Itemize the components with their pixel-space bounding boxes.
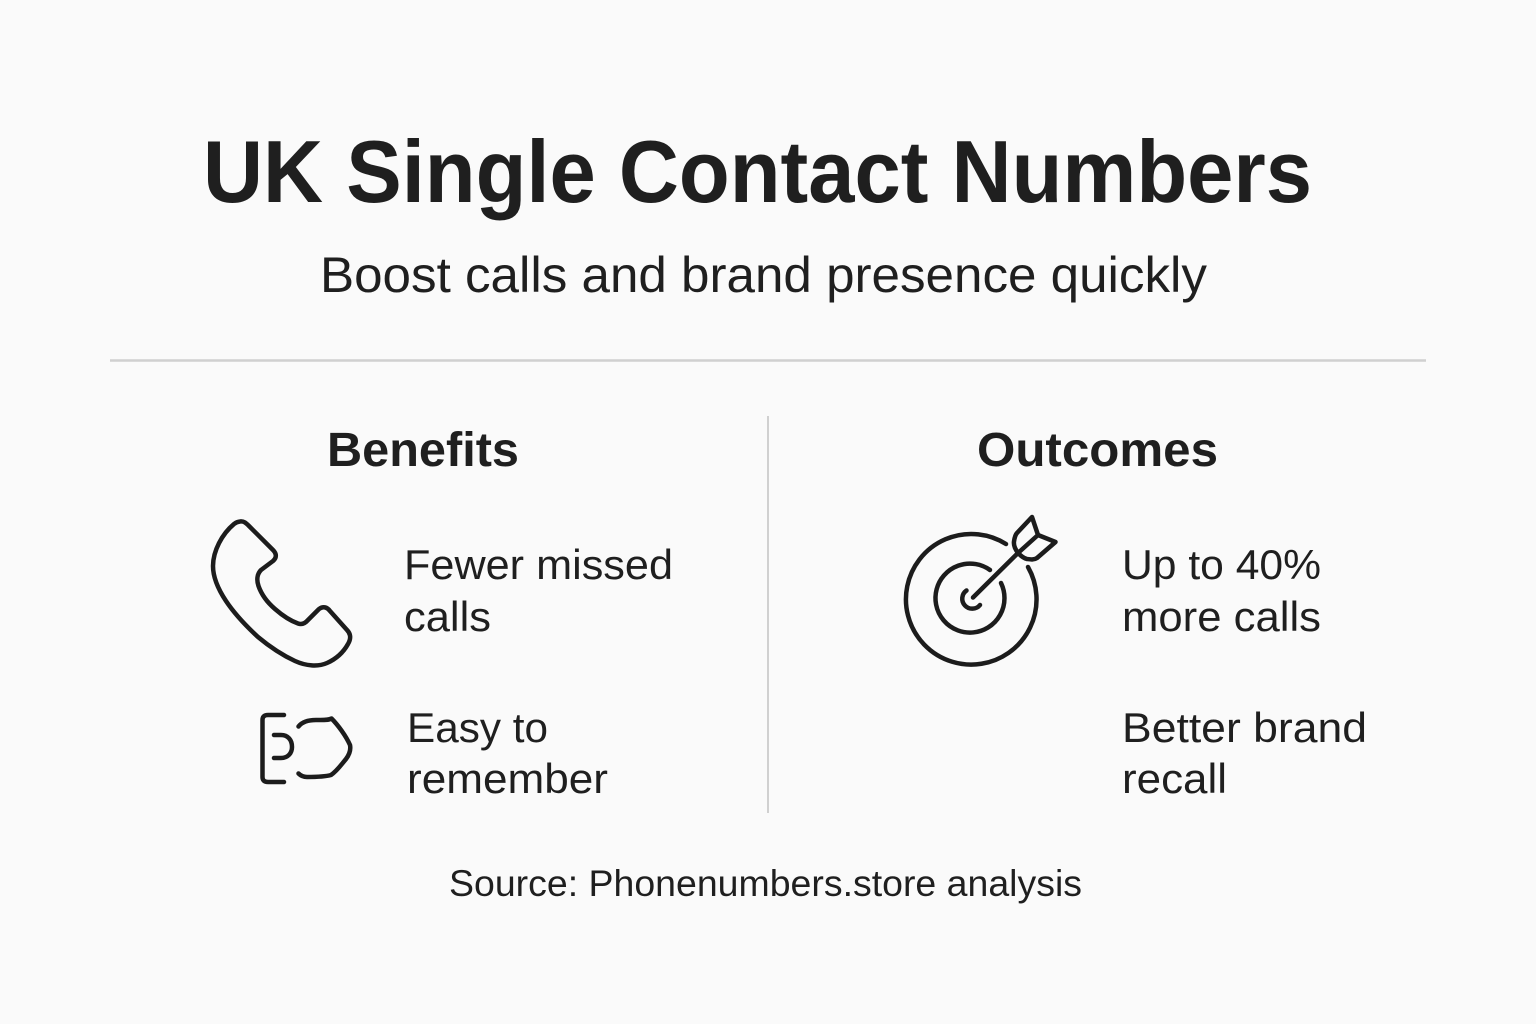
- title: UK Single Contact Numbers: [203, 122, 1312, 221]
- text: better brand recall: [1122, 704, 1367, 802]
- text: fewer missed calls: Fewer missed: [404, 541, 673, 588]
- heading: benefits: Benefits: [327, 424, 519, 477]
- text: fewer missed calls: calls: [404, 593, 491, 640]
- source note: Source: Phonenumbers.store analysis: [449, 863, 1082, 904]
- text: better brand recall: recall: [1122, 755, 1227, 802]
- text: fewer missed calls: [404, 541, 673, 640]
- icon: number badge: [262, 715, 350, 782]
- text: easy to remember: remember: [407, 755, 608, 802]
- heading: outcomes: Outcomes: [977, 424, 1218, 477]
- text: easy to remember: [407, 704, 608, 802]
- text: up to 40% more calls: Up to 40%: [1122, 541, 1321, 588]
- text: up to 40% more calls: more calls: [1122, 593, 1321, 640]
- icon: target with arrow: [906, 517, 1056, 665]
- panel: outcomes: [906, 424, 1367, 802]
- text: better brand recall: Better brand: [1122, 704, 1367, 751]
- text: easy to remember: Easy to: [407, 704, 548, 751]
- subtitle: Boost calls and brand presence quickly: [320, 247, 1207, 303]
- panel: benefits: [213, 424, 673, 802]
- icon: phone handset: [213, 521, 350, 665]
- text: up to 40% more calls: [1122, 541, 1321, 640]
